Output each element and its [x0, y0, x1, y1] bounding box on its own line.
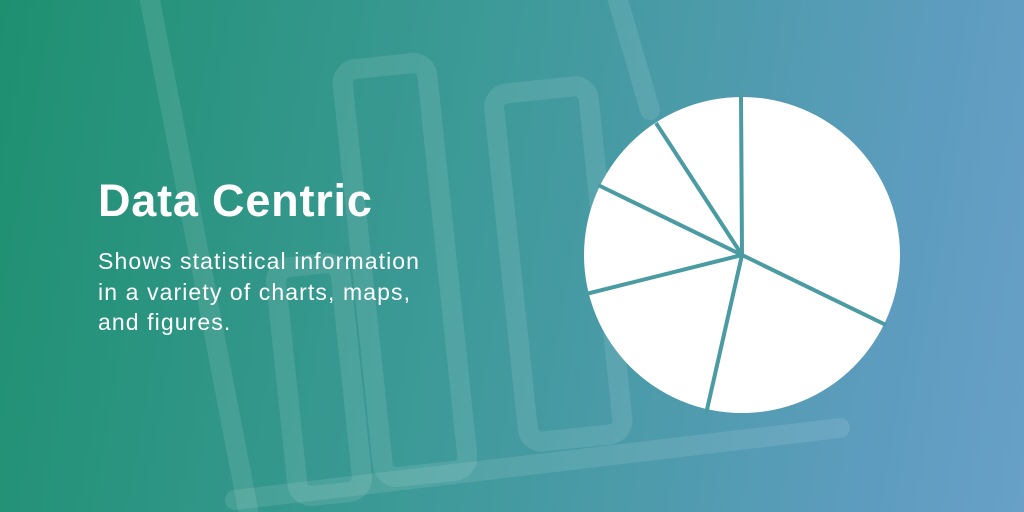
description: in a variety of charts, maps, — [98, 278, 411, 304]
description — [98, 248, 420, 335]
description: and figures. — [98, 309, 231, 335]
title: Data Centric — [98, 175, 373, 226]
description: Shows statistical information — [98, 248, 420, 274]
